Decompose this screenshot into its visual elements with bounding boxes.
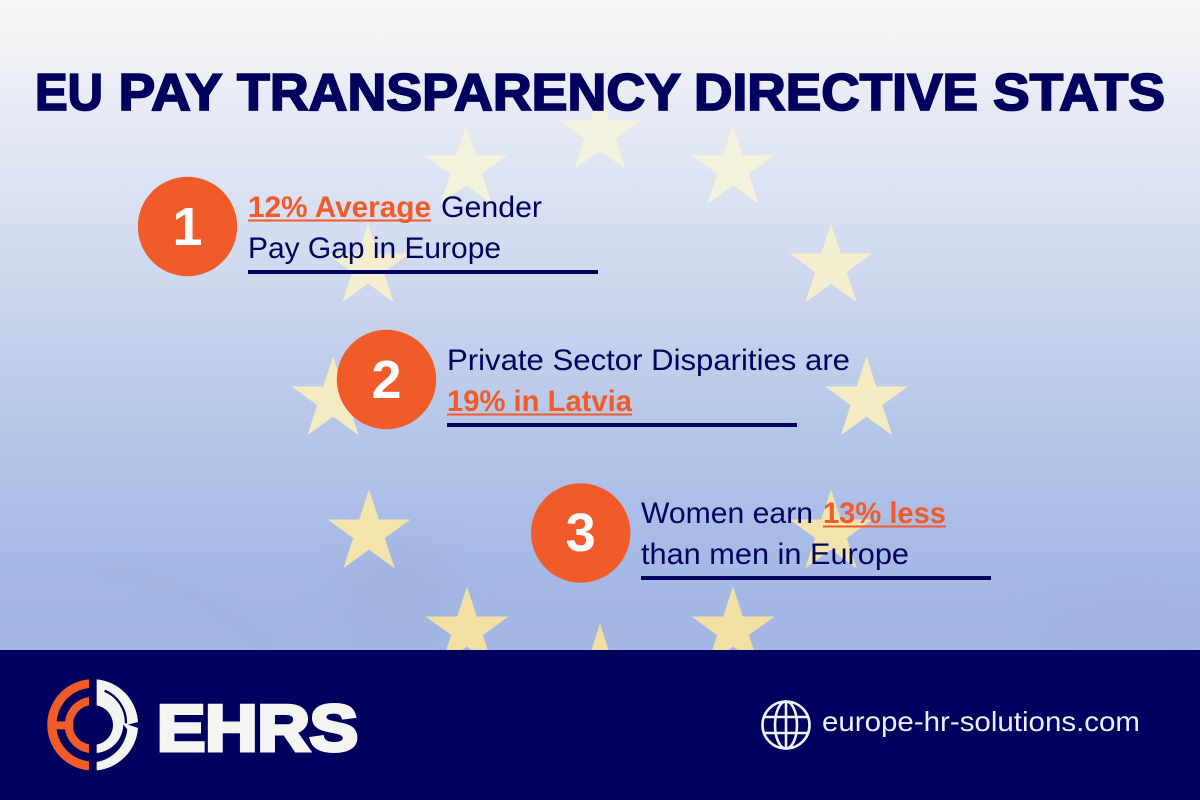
stat 2 text: Private Sector Disparities are xyxy=(447,344,850,377)
number badge 3 xyxy=(531,483,630,583)
logo: EHRS xyxy=(47,679,358,770)
number badge 3: 3 xyxy=(566,503,596,563)
stat 2 text xyxy=(447,344,850,418)
stat 1 text: Pay Gap in Europe xyxy=(248,232,501,265)
title xyxy=(35,64,1165,122)
stat 3 text: Women earn xyxy=(641,497,813,530)
icon: globe xyxy=(762,702,810,748)
title: PAY xyxy=(118,64,222,122)
stat 1 text xyxy=(248,191,542,265)
number badge 2 xyxy=(337,330,436,429)
logo mark xyxy=(47,679,138,770)
stat 1 text: Gender xyxy=(441,191,542,224)
stat 3 xyxy=(531,483,991,583)
title: STATS xyxy=(993,64,1165,122)
stat 1 text: 12% Average xyxy=(248,191,431,224)
website url: europe-hr-solutions.com xyxy=(822,706,1140,737)
title: TRANSPARENCY xyxy=(237,64,681,122)
stat 3 text: 13% less xyxy=(823,497,946,530)
website link xyxy=(762,702,1140,748)
stat 2 text: 19% in Latvia xyxy=(447,385,632,418)
stat 3 text: than men in Europe xyxy=(641,538,909,571)
stat 2 xyxy=(337,330,850,429)
stat 3 text xyxy=(641,497,946,571)
number badge 1 xyxy=(138,177,237,276)
EU stars circle xyxy=(292,90,908,702)
title: EU xyxy=(35,64,103,122)
number badge 1: 1 xyxy=(172,197,203,257)
logo wordmark: EHRS xyxy=(157,692,358,764)
title: DIRECTIVE xyxy=(694,64,978,122)
stat 1 xyxy=(138,177,598,276)
number badge 2: 2 xyxy=(371,350,402,410)
footer band xyxy=(0,650,1200,800)
